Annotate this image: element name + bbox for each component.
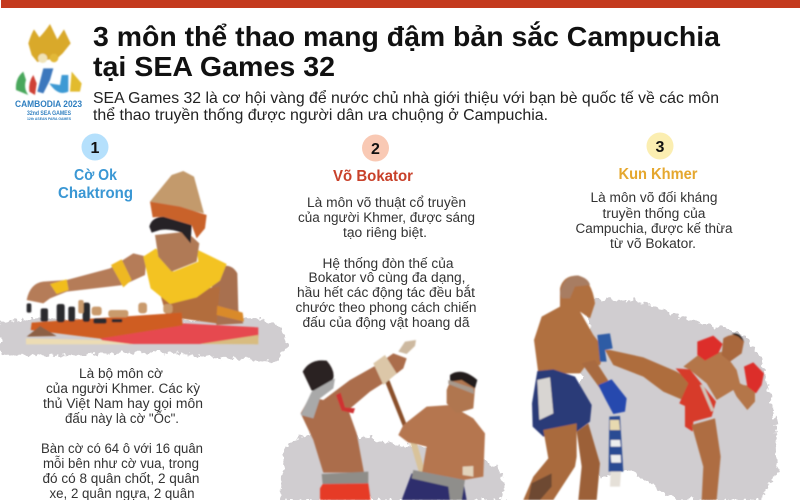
legs — [523, 423, 577, 500]
chess board — [31, 313, 183, 339]
far arm — [210, 266, 243, 325]
description 1: của người Khmer. Các kỳ — [46, 381, 200, 396]
description 2: của người Khmer, được sáng — [298, 210, 475, 225]
logo: Cambodia 2023 SEA Games: 12th ASEAN PARA GAMES — [27, 116, 71, 121]
shorts — [532, 369, 592, 437]
photo: Kun Khmer fighters — [523, 276, 764, 500]
description 2: Hệ thống đòn thế của — [322, 256, 454, 271]
yellow collar — [143, 248, 227, 304]
background brush strokes — [0, 298, 778, 500]
description 2: đấu của động vật hoang dã — [302, 315, 470, 330]
stick — [385, 380, 407, 427]
title: 3 môn thể thao mang đậm bản sắc Campuchia — [93, 21, 720, 52]
description 2: Là môn võ thuật cổ truyền — [307, 195, 466, 210]
description 1: mỗi bên như cờ vua, trong — [43, 456, 199, 471]
neck and face — [155, 232, 199, 272]
description 2: tạo riêng biệt. — [343, 225, 427, 240]
description 1: Là bộ môn cờ — [79, 366, 163, 381]
corner flag — [609, 416, 623, 472]
description 3 — [576, 190, 733, 251]
heading: Võ Bokator: Võ Bokator — [333, 168, 413, 185]
description 3: truyền thống của — [602, 206, 706, 221]
intro text: thể thao truyền thống được người dân ưa chuộng ở Campuchia. — [93, 106, 548, 124]
description 2 — [296, 195, 476, 330]
number badge 2: 2 — [371, 141, 380, 158]
description 1: đấu này là cờ "Ốc". — [65, 411, 179, 426]
number badge 3: 3 — [656, 139, 665, 156]
logo: Cambodia 2023 SEA Games: 32nd SEA GAMES — [27, 111, 71, 117]
hat — [150, 171, 204, 213]
section 2: Võ Bokator — [296, 134, 485, 500]
reaching arm — [27, 253, 147, 303]
table — [100, 323, 258, 344]
armband — [217, 306, 244, 322]
logo: Cambodia 2023 SEA Games — [15, 24, 82, 121]
description 1: thủ Việt Nam hay gọi môn — [43, 396, 203, 411]
logo: Cambodia 2023 SEA Games: CAMBODIA 2023 — [15, 99, 82, 110]
section 1: Cờ Ok Chaktrong — [26, 134, 258, 500]
description 2: Bokator vô cùng đa dạng, — [308, 270, 466, 285]
chess pieces — [27, 303, 122, 324]
photo: Bokator fighters — [301, 340, 485, 500]
kicking fighter — [605, 350, 690, 402]
heading: Cờ Ok Chaktrong: Chaktrong — [58, 185, 133, 202]
section 3: Kun Khmer — [523, 132, 764, 500]
torso — [160, 287, 220, 323]
number badge 2 — [362, 134, 389, 162]
heading: Cờ Ok Chaktrong: Cờ Ok — [74, 167, 117, 184]
hair — [149, 217, 192, 243]
heading: Cờ Ok Chaktrong — [58, 167, 133, 202]
heading: Kun Khmer: Kun Khmer — [618, 166, 698, 183]
number badge 1 — [82, 134, 108, 160]
number badge 3 — [646, 132, 674, 160]
red shorts — [676, 368, 716, 432]
description 1 — [41, 366, 203, 500]
number badge 1: 1 — [91, 140, 100, 157]
red gloves — [697, 336, 723, 361]
top bar — [1, 0, 800, 8]
photo: chess player — [26, 171, 258, 344]
left fighter body — [534, 276, 605, 373]
description 3: từ võ Bokator. — [610, 236, 696, 251]
right fighter — [398, 405, 485, 480]
left fighter — [301, 353, 407, 473]
intro text: SEA Games 32 là cơ hội vàng để nước chủ nhà giới thiệu với bạn bè quốc tế về các môn — [93, 89, 719, 107]
description 3: Là môn võ đối kháng — [590, 190, 718, 205]
intro text — [93, 89, 719, 124]
description 2: chước theo phong cách chiến — [296, 300, 476, 315]
title: tại SEA Games 32 — [93, 51, 335, 82]
title — [93, 21, 720, 82]
description 1: đó có 8 quân chốt, 2 quân — [42, 471, 200, 486]
standing leg — [692, 418, 721, 500]
description 2: hầu hết các động tác đều bắt — [297, 285, 475, 300]
description 1: Bàn cờ có 64 ô với 16 quân — [41, 441, 203, 456]
description 3: Campuchia, được kế thừa — [576, 221, 733, 236]
